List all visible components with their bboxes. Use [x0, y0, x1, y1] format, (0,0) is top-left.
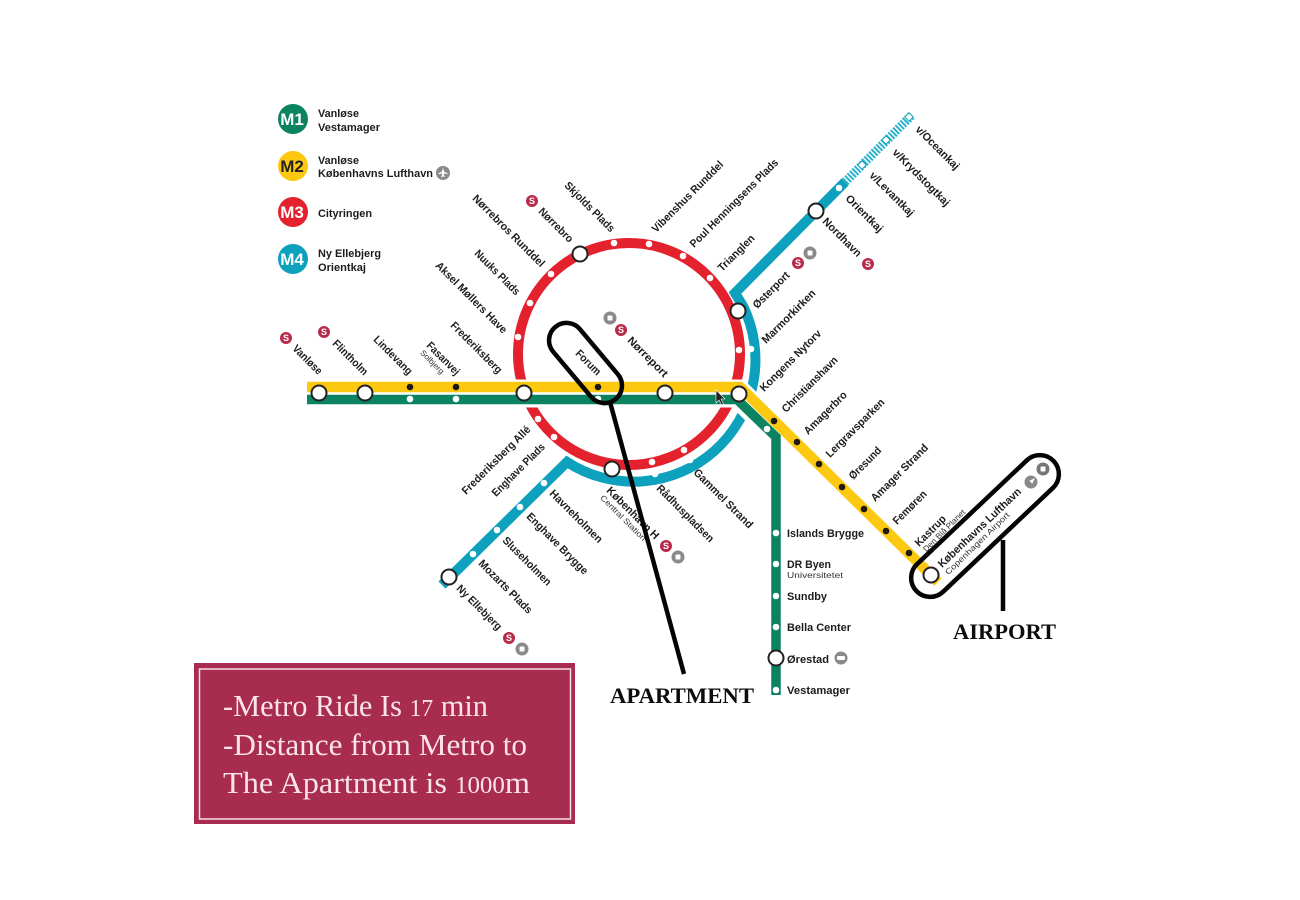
grey transfer icons	[516, 246, 1050, 664]
station labels: descending: Flintholm	[330, 338, 370, 378]
station labels: ascending	[460, 157, 1024, 577]
legend item: M4: M4	[280, 250, 304, 269]
legend item: M1: Vanløse	[318, 108, 359, 120]
station labels: ascending: Øresund	[847, 445, 884, 482]
airport callout	[903, 447, 1067, 644]
station labels: horizontal M1 branch	[787, 528, 864, 697]
station labels: horizontal M1 branch: Ørestad	[787, 654, 829, 666]
legend item: M2: M2	[280, 157, 304, 176]
S-train icons: S	[865, 259, 871, 269]
callout line to airport label	[1001, 540, 1005, 611]
station labels: ascending: Den Blå Planet	[921, 507, 968, 554]
apartment label: APARTMENT	[610, 683, 754, 708]
station labels: descending: Skjolds Plads	[562, 180, 617, 235]
station labels: ascending: Copenhagen Airport	[943, 510, 1012, 577]
station labels: horizontal M1 branch: Islands Brygge	[787, 528, 864, 540]
station labels: ascending: Lergravsparken	[824, 396, 888, 460]
station labels: descending: Gammel Strand	[691, 467, 755, 531]
S-train icons: S	[321, 327, 327, 337]
station labels: ascending: Kongens Nytorv	[758, 327, 825, 394]
legend item: M1	[278, 104, 381, 134]
station labels: ascending: Østerport	[751, 269, 793, 311]
legend item: M1: M1	[280, 110, 304, 129]
station labels: descending: Nuuks Plads	[472, 248, 522, 298]
M4 teal line	[442, 115, 912, 585]
station labels: ascending: Frederiksberg Allé	[460, 424, 533, 497]
station labels: ascending: Enghave Plads	[490, 441, 548, 499]
station labels: descending: v/Oceankaj	[913, 124, 962, 173]
station labels: horizontal M1 branch: Sundby	[787, 591, 828, 603]
legend item: M2: Københavns Lufthavn	[318, 168, 433, 180]
small black stations	[407, 384, 912, 556]
station labels: descending: Central Station	[598, 493, 648, 543]
legend item: M2: Vanløse	[318, 155, 359, 167]
small white stations	[407, 113, 913, 693]
legend	[278, 104, 450, 274]
station labels: ascending: Christianshavn	[780, 354, 841, 415]
station labels: ascending: Femøren	[891, 488, 930, 527]
S-train icons: S	[663, 541, 669, 551]
legend item: M3: Cityringen	[318, 208, 372, 220]
station labels: ascending: Trianglen	[716, 232, 758, 274]
station labels: ascending: Vibenshus Runddel	[650, 159, 726, 235]
station labels: descending: Aksel Møllers Have	[433, 260, 509, 336]
station labels: descending: Solbjerg	[418, 348, 446, 376]
station labels: descending: Nørrebro	[536, 206, 576, 246]
legend item: M3	[278, 197, 372, 227]
station labels: ascending: Amagerbro	[802, 389, 850, 437]
station labels: descending: Nørreport	[625, 335, 670, 380]
station labels: ascending: Københavns Lufthavn	[936, 486, 1024, 570]
S-train icons: S	[529, 196, 535, 206]
icon: mouse cursor	[716, 390, 725, 405]
M2 yellow line	[307, 387, 938, 582]
station labels: ascending: Amager Strand	[869, 442, 931, 504]
station labels: horizontal M1 branch: Bella Center	[787, 622, 852, 634]
S-train icons: S	[506, 633, 512, 643]
station labels: descending: Lindevang	[371, 334, 415, 378]
M1 green line	[307, 400, 776, 695]
station labels: horizontal M1 branch: Universitetet	[787, 571, 844, 580]
station labels: descending: Enghave Brygge	[524, 511, 590, 577]
station labels: descending: Frederiksberg	[448, 320, 504, 376]
text: distance line two: The Apartment is 1000m	[223, 765, 530, 800]
station labels: descending: v/Levantkaj	[867, 170, 916, 219]
legend item: M4: Orientkaj	[318, 262, 366, 274]
airport label: AIRPORT	[953, 619, 1056, 644]
station labels: descending: København H	[604, 485, 661, 542]
legend item: M2	[278, 151, 450, 181]
station labels: descending: v/Krydstogtkaj	[890, 147, 952, 209]
legend item: M3: M3	[280, 203, 304, 222]
callout: Forum station oval	[542, 316, 629, 410]
callout: airport station oval	[903, 447, 1067, 605]
station labels: descending: Forum	[573, 348, 603, 378]
station labels: descending: Ny Ellebjerg	[454, 583, 504, 633]
legend item: M4	[278, 244, 381, 274]
text: distance line one: -Distance from Metro to	[223, 727, 527, 762]
legend item: M1: Vestamager	[318, 122, 381, 134]
panel: trip information	[194, 663, 575, 824]
station labels: descending: Havneholmen	[547, 488, 605, 546]
station labels: descending: Vanløse	[290, 343, 324, 377]
station labels: ascending: Kastrup	[913, 513, 949, 549]
interchange stations	[312, 204, 938, 666]
station labels: ascending: Marmorkirken	[760, 287, 819, 346]
apartment callout	[542, 316, 754, 708]
station labels: descending: Orientkaj	[843, 193, 885, 235]
legend item: M4: Ny Ellebjerg	[318, 248, 381, 260]
white casing around M1 and M2	[300, 394, 778, 433]
S-train icons	[280, 195, 874, 644]
text: metro ride time: -Metro Ride Is 17 min	[223, 688, 488, 723]
station labels: descending: Sluseholmen	[500, 535, 554, 589]
station labels: descending: Nørrebros Runddel	[470, 193, 547, 270]
S-train icons: S	[283, 333, 289, 343]
metro network lines	[300, 115, 938, 695]
station labels: descending: Fasanvej	[424, 340, 462, 378]
S-train icons: S	[618, 325, 624, 335]
station labels: descending: Rådhuspladsen	[654, 483, 716, 545]
station labels: descending	[290, 124, 962, 633]
callout line to apartment label	[610, 402, 684, 674]
station labels: horizontal M1 branch: Vestamager	[787, 685, 851, 697]
S-train icons: S	[795, 258, 801, 268]
M3 red ring	[518, 243, 740, 465]
station labels: descending: Mozarts Plads	[476, 558, 534, 616]
station labels: ascending: Poul Henningsens Plads	[688, 157, 781, 250]
station labels: horizontal M1 branch: DR Byen	[787, 559, 831, 571]
station labels: descending: Nordhavn	[820, 216, 864, 260]
